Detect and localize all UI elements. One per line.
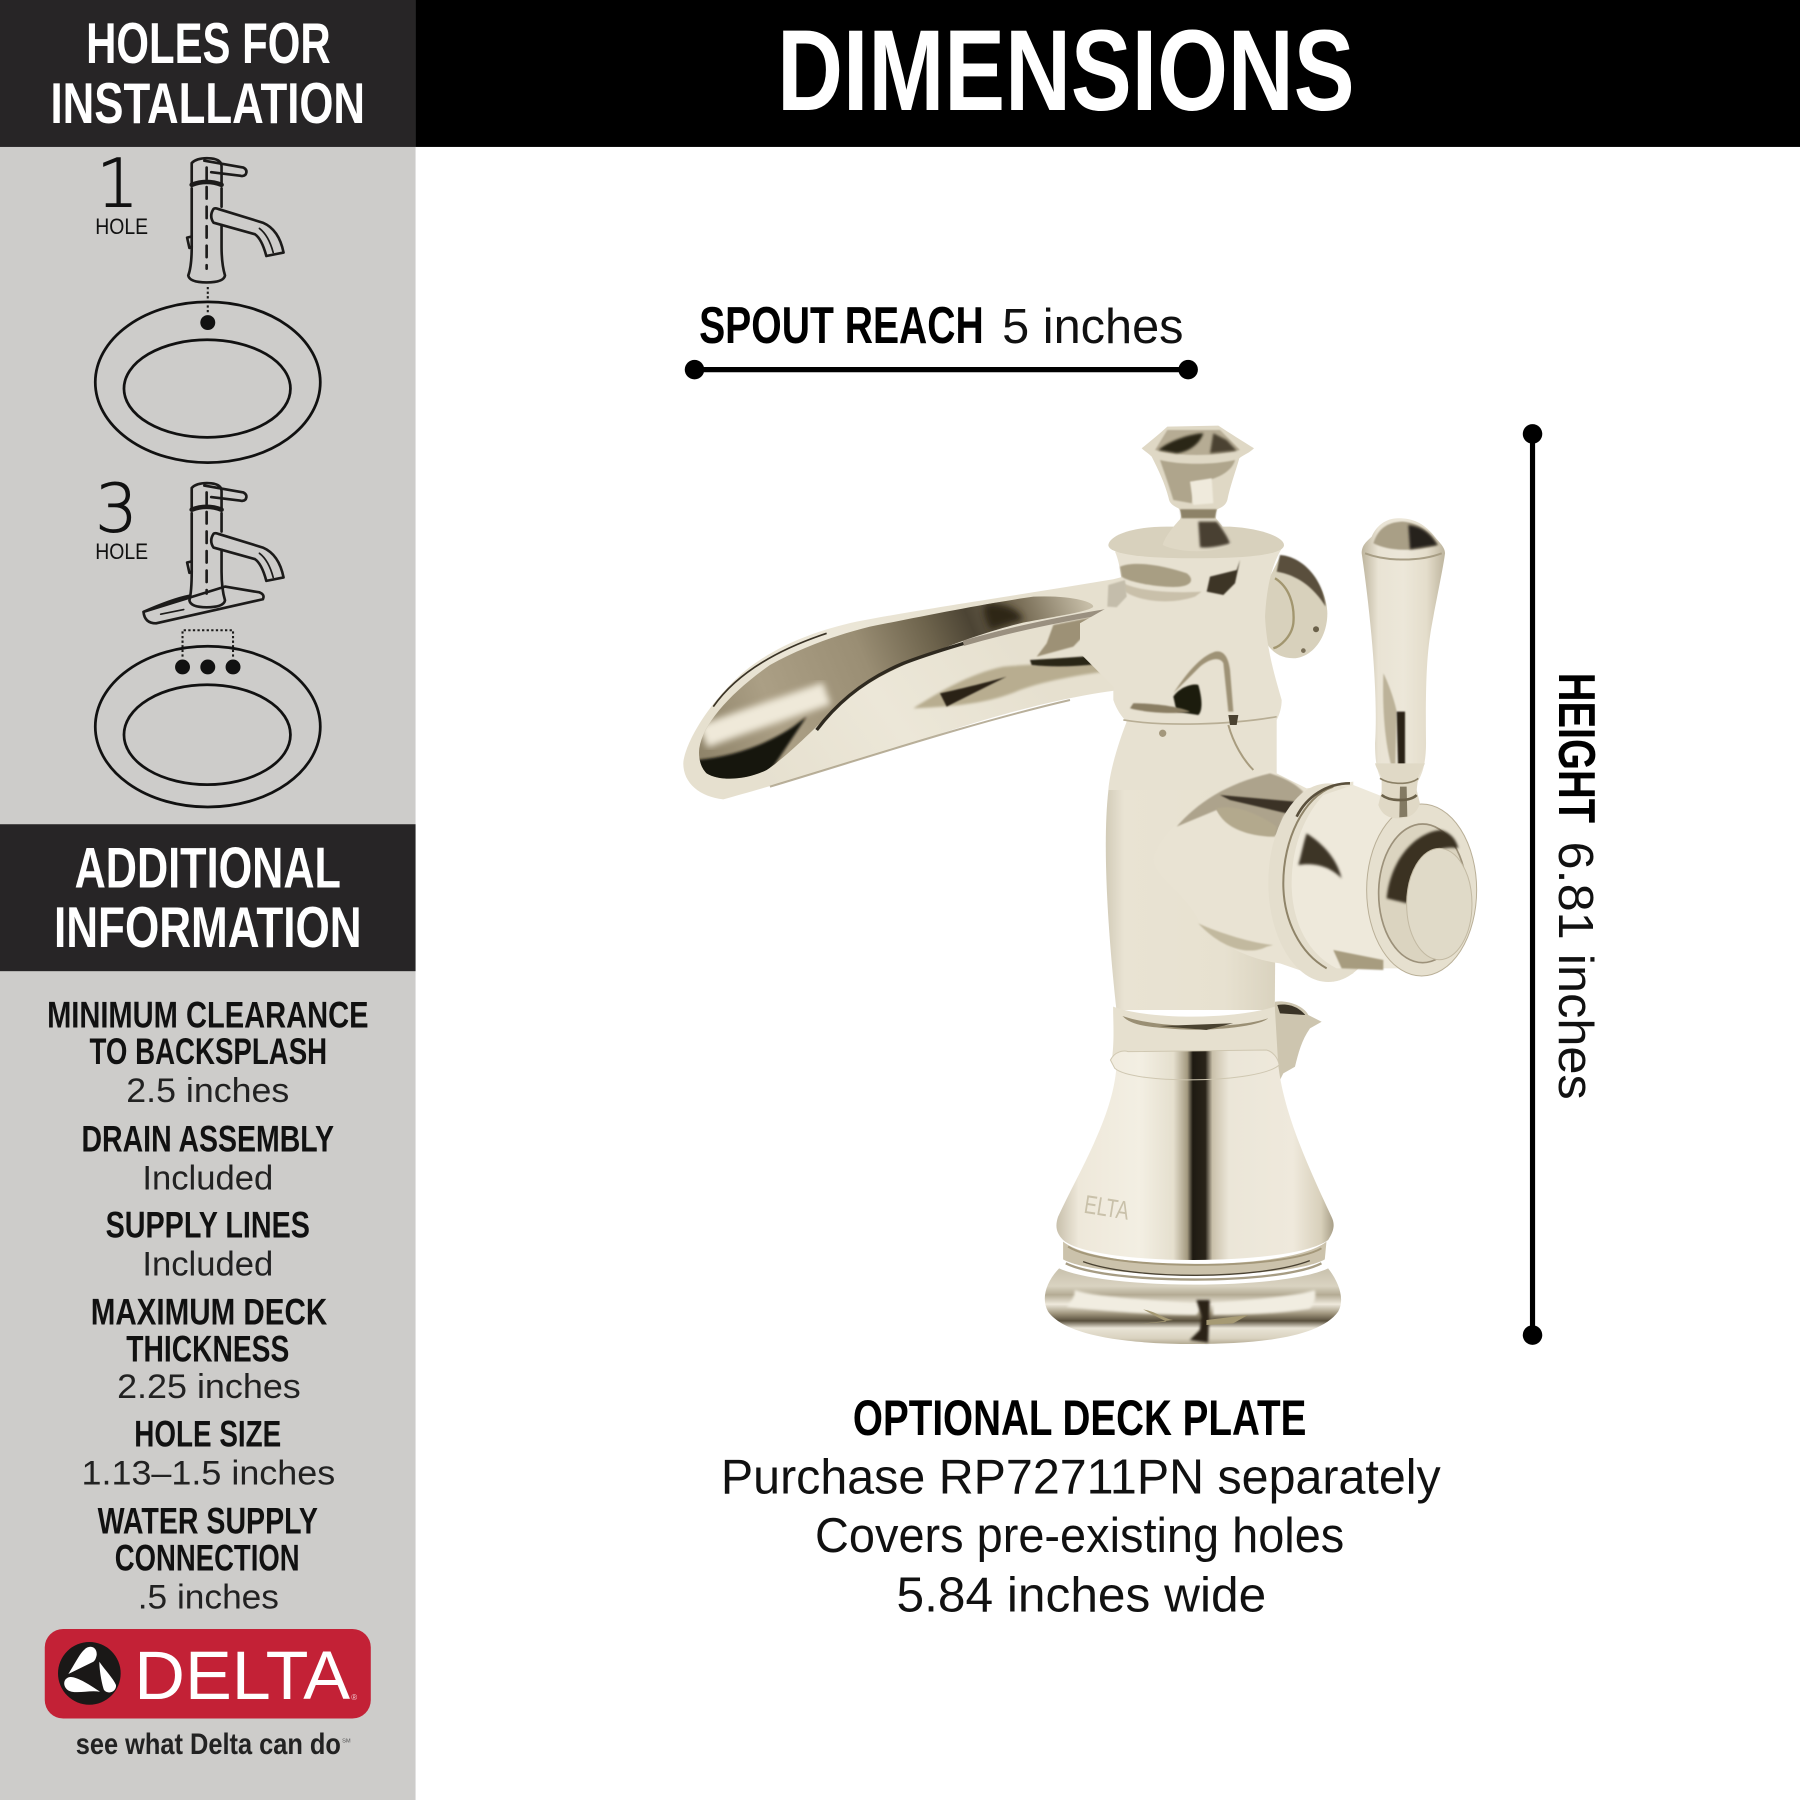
column lower — [1106, 790, 1276, 1010]
heading: holes for installation — [0, 0, 416, 147]
icon: delta emblem — [58, 1642, 121, 1705]
spec: minimum clearance: MINIMUM CLEARANCE — [47, 994, 368, 1035]
neck and top disc — [1080, 426, 1284, 790]
spec: minimum clearance: 2.5 inches — [126, 1072, 289, 1110]
spec: hole size: HOLE SIZE — [134, 1413, 281, 1454]
logo: delta: see what Delta can do — [76, 1728, 341, 1761]
text block: optional deck plate: Covers pre-existing holes — [815, 1508, 1344, 1563]
heading: holes for installation: HOLES FOR — [86, 12, 331, 76]
hub ring — [1268, 783, 1388, 982]
spec: hole size: 1.13–1.5 inches — [82, 1454, 335, 1492]
logo: delta: DELTA — [134, 1637, 350, 1714]
logo: delta: SM — [342, 1739, 351, 1745]
dimension: height — [1523, 424, 1606, 1345]
handle hub — [1153, 770, 1477, 982]
heading: holes for installation: INSTALLATION — [51, 72, 365, 136]
column and base — [1045, 790, 1341, 1344]
dimension: height: HEIGHT — [1548, 673, 1606, 823]
lever base — [1375, 763, 1425, 818]
neck reflections — [1120, 564, 1191, 587]
spec: water supply connection: WATER SUPPLY — [98, 1501, 318, 1542]
spec: water supply connection — [98, 1501, 318, 1616]
heading: dimensions — [416, 0, 1800, 147]
text block: additional information list — [47, 994, 368, 1616]
icon: faucet with deck plate — [143, 483, 284, 623]
icon: 3 hole installation: HOLE — [95, 539, 148, 564]
heading: additional information: ADDITIONAL — [75, 836, 341, 900]
foot — [1045, 1268, 1341, 1344]
spout — [683, 577, 1126, 800]
spec: maximum deck thickness — [91, 1292, 328, 1406]
text block: optional deck plate: 5.84 inches wide — [897, 1568, 1266, 1623]
dimension: spout reach: 5 inches — [1002, 299, 1184, 354]
spec: supply lines: Included — [142, 1245, 273, 1283]
top knob — [1142, 426, 1254, 551]
dimension: spout reach — [685, 296, 1198, 379]
logo: delta: ® — [351, 1693, 357, 1702]
cone rim — [1063, 1242, 1326, 1275]
heading: additional information: INFORMATION — [54, 896, 362, 960]
spec: minimum clearance — [47, 994, 368, 1110]
spec: supply lines — [106, 1204, 310, 1283]
lever handle — [1362, 518, 1445, 818]
icon: 3 hole installation — [95, 470, 320, 807]
icon: sink with one hole — [95, 302, 320, 463]
spec: maximum deck thickness: MAXIMUM DECK — [91, 1292, 328, 1333]
heading: additional information — [0, 824, 416, 971]
icon: 1 hole installation: HOLE — [95, 214, 148, 239]
spec: hole size — [82, 1413, 335, 1492]
base cone — [1056, 1063, 1334, 1260]
spout basin — [699, 596, 1094, 779]
spec: maximum deck thickness: 2.25 inches — [117, 1368, 301, 1406]
spec: drain assembly: DRAIN ASSEMBLY — [82, 1118, 334, 1159]
engraved logo: ELTA — [1082, 1189, 1132, 1226]
spec: water supply connection: .5 inches — [138, 1578, 279, 1616]
icon: 1 hole installation: 1 — [96, 145, 139, 223]
hub end cap — [1367, 804, 1477, 976]
lift rod — [1273, 1001, 1322, 1087]
spec: minimum clearance: TO BACKSPLASH — [90, 1031, 327, 1072]
collar ring — [1111, 1007, 1278, 1063]
text block: optional deck plate — [721, 1389, 1441, 1623]
text block: optional deck plate: Purchase RP72711PN separately — [721, 1449, 1441, 1504]
shoulder — [1110, 1050, 1279, 1080]
heading: dimensions: DIMENSIONS — [777, 7, 1355, 135]
panel: left sidebar — [0, 0, 416, 1800]
spec: water supply connection: CONNECTION — [115, 1537, 300, 1578]
spec: supply lines: SUPPLY LINES — [106, 1204, 310, 1245]
spec: drain assembly — [82, 1118, 334, 1197]
rear circle — [1260, 555, 1327, 658]
lever upper — [1362, 518, 1445, 810]
top disc — [1108, 527, 1284, 558]
dimension: height: 6.81 inches — [1548, 841, 1603, 1100]
basin rim lines — [713, 633, 827, 707]
spec: drain assembly: Included — [142, 1159, 273, 1197]
icon: 1 hole installation — [95, 145, 320, 463]
logo: delta — [45, 1629, 371, 1761]
text block: optional deck plate: OPTIONAL DECK PLATE — [853, 1389, 1306, 1446]
icon: sink with three holes — [95, 646, 320, 807]
dimension: spout reach: SPOUT REACH — [699, 296, 984, 354]
icon: 3 hole installation: 3 — [95, 470, 138, 548]
icon: faucet line drawing — [187, 158, 284, 282]
illustration: faucet — [670, 426, 1477, 1344]
hub cylinder — [1292, 785, 1400, 968]
spout reflections — [913, 655, 1130, 708]
spec: maximum deck thickness: THICKNESS — [126, 1328, 289, 1369]
